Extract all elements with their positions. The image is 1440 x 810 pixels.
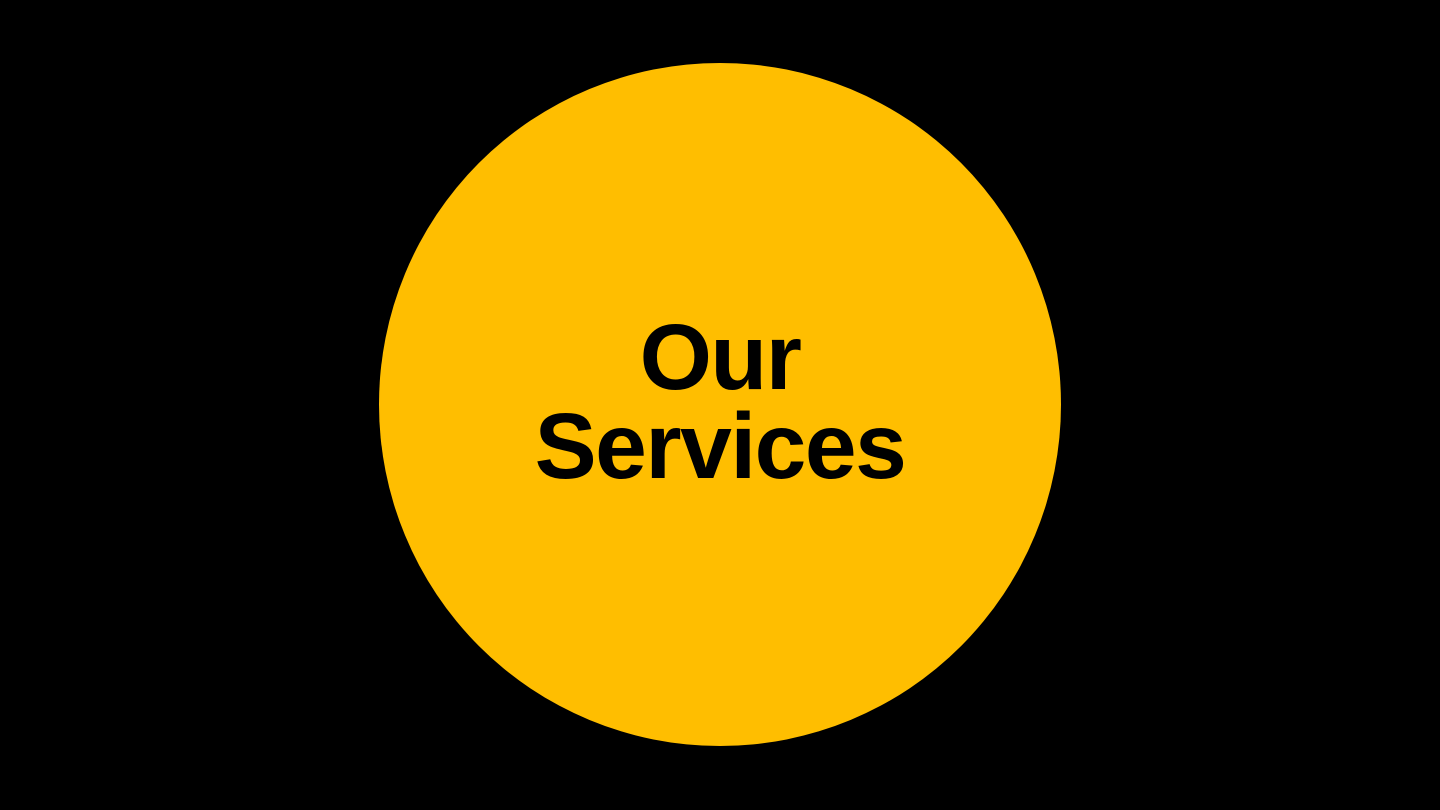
title: Our Services: Our (640, 305, 800, 409)
yellow circle (379, 63, 1061, 746)
title: Our Services: Services (535, 394, 905, 498)
